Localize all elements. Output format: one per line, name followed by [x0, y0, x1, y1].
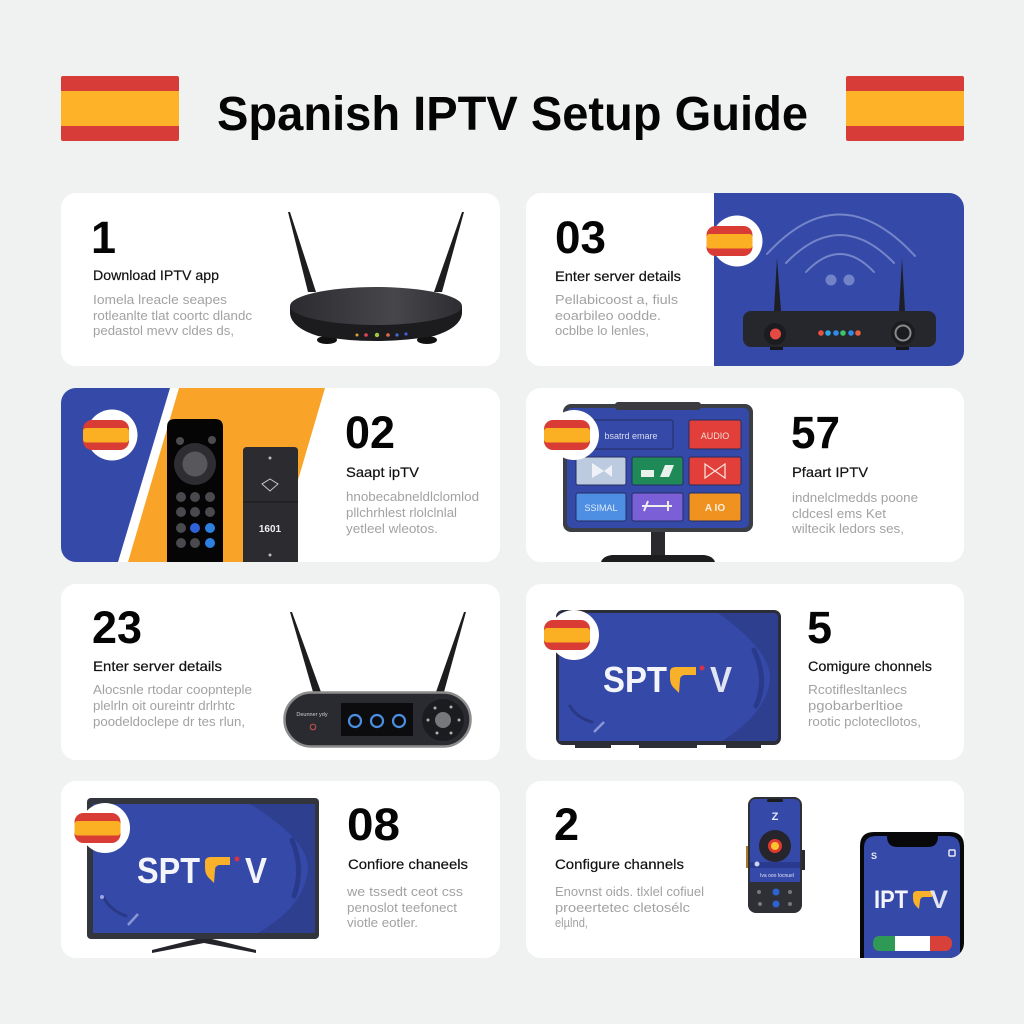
step heading: Enter server details	[93, 658, 222, 674]
step description	[93, 682, 252, 729]
panel: step 08 configure channels	[61, 781, 500, 958]
step description: elµlnd,	[555, 915, 588, 930]
icon: wifi waves	[767, 214, 915, 286]
icon: tv with app grid: bsatrd emare	[604, 431, 658, 441]
panel: step 23 enter server details	[61, 584, 500, 760]
icon: small phone: Iva ooo Iocnuel	[760, 873, 794, 879]
header flag: right	[846, 76, 964, 141]
panel: step 2 configure channels	[526, 781, 964, 958]
step number: 57	[791, 407, 840, 458]
icon: small phone	[746, 797, 805, 913]
step description: eoarbileo oodde.	[555, 308, 661, 323]
badge: flag	[83, 410, 138, 460]
icon: tv with SPTV logo	[87, 798, 319, 953]
blue image area	[714, 193, 964, 366]
step description	[808, 682, 921, 729]
step description	[555, 292, 679, 338]
icon: tv with app grid: AUDIO	[701, 431, 729, 441]
step description: penoslot teefonect	[347, 900, 457, 915]
step description: Rcotiflesltanlecs	[808, 682, 908, 697]
icon: small phone: Z	[772, 811, 779, 823]
step description	[346, 489, 479, 536]
step number: 2	[554, 799, 579, 850]
badge: flag	[706, 216, 762, 266]
step number: 5	[807, 602, 832, 653]
step description: Enovnst oids. tlxlel cofiuel	[555, 884, 704, 899]
step description	[791, 490, 918, 536]
blue slanted band	[61, 388, 170, 562]
step description: plelrln oit oureintr drlrhtc	[93, 698, 236, 713]
step description: rootic pclotecllotos,	[808, 714, 921, 729]
badge: flag	[74, 803, 130, 853]
step heading: Enter server details	[555, 268, 681, 284]
step number: 03	[555, 212, 606, 263]
icon: tv with SPTV logo: V	[710, 659, 732, 700]
icon: dark router on blue	[743, 258, 936, 350]
step heading: Pfaart IPTV	[792, 464, 869, 480]
step description: pllchrhlest rlolclnlal	[346, 505, 457, 520]
icon: tv with app grid: A IO	[705, 503, 725, 514]
icon: tv with SPTV logo: SPT	[137, 850, 200, 891]
panel: step 57 tv app grid	[526, 388, 964, 562]
icon: large phone with IPTV logo: V	[930, 886, 948, 914]
step description	[93, 292, 253, 338]
icon: dark grey remote	[243, 447, 298, 562]
step description: pgobarberltioe	[808, 698, 903, 713]
badge: flag	[544, 610, 599, 660]
step description: proeertetec cletosélc	[555, 900, 691, 915]
panel: step 02 remotes	[61, 388, 500, 562]
icon: large phone with IPTV logo	[860, 832, 964, 958]
step heading: Comigure chonnels	[808, 658, 932, 674]
step description: rotleanlte tlat coortc dlandc	[93, 308, 253, 323]
step number: 1	[91, 212, 116, 263]
step description: Iomela lreacle seapes	[93, 292, 228, 307]
icon: black remote	[167, 419, 223, 562]
icon: tv with app grid	[563, 402, 753, 562]
step heading: Configure channels	[555, 856, 684, 872]
icon: tv with SPTV logo: V	[245, 850, 267, 891]
header flag: left	[61, 76, 179, 141]
step number: 02	[345, 407, 395, 458]
icon: media box with antennas: Deunner ydy	[296, 712, 328, 718]
badge: flag	[544, 410, 599, 460]
step description: hnobecabneldlclomlod	[346, 489, 479, 504]
icon: tv with SPTV logo: SPT	[603, 659, 667, 700]
orange slanted band	[128, 388, 325, 562]
step description	[346, 884, 464, 930]
icon: tv with SPTV logo	[556, 610, 781, 748]
step description: pedastol mevv cldes ds,	[93, 323, 234, 338]
step heading: Confiore chaneels	[348, 856, 468, 872]
icon: dark grey remote: 1601	[259, 524, 282, 535]
step description: viotle eotler.	[347, 915, 418, 930]
step description: ocblbe lo lenles,	[555, 323, 649, 338]
step description	[555, 884, 704, 930]
panel: step 1 download app	[61, 193, 500, 366]
step heading: Saapt ipTV	[346, 464, 420, 480]
panel: step 5 configure channels	[526, 584, 964, 760]
step heading: Download IPTV app	[93, 267, 219, 283]
step description: indnelclmedds poone	[792, 490, 918, 505]
step description: we tssedt ceot css	[346, 884, 464, 899]
step description: cldcesl ems Ket	[792, 506, 886, 521]
step number: 23	[92, 602, 142, 653]
icon: tv with app grid: SSIMAL	[584, 503, 618, 513]
step description: poodeldoclepe dr tes rlun,	[93, 714, 245, 729]
title: Spanish IPTV Setup Guide	[217, 88, 808, 141]
step number: 08	[347, 799, 400, 850]
step description: wiltecik ledors ses,	[791, 521, 904, 536]
step description: yetleel wleotos.	[346, 521, 438, 536]
icon: media box with antennas	[284, 612, 470, 746]
icon: black round router	[288, 212, 464, 344]
icon: large phone with IPTV logo: IPT	[874, 886, 908, 914]
panel: step 03 enter server details	[526, 193, 964, 366]
icon: large phone with IPTV logo: S	[871, 851, 877, 861]
step description: Alocsnle rtodar coopnteple	[93, 682, 252, 697]
step description: Pellabicoost a, fiuls	[555, 292, 679, 307]
